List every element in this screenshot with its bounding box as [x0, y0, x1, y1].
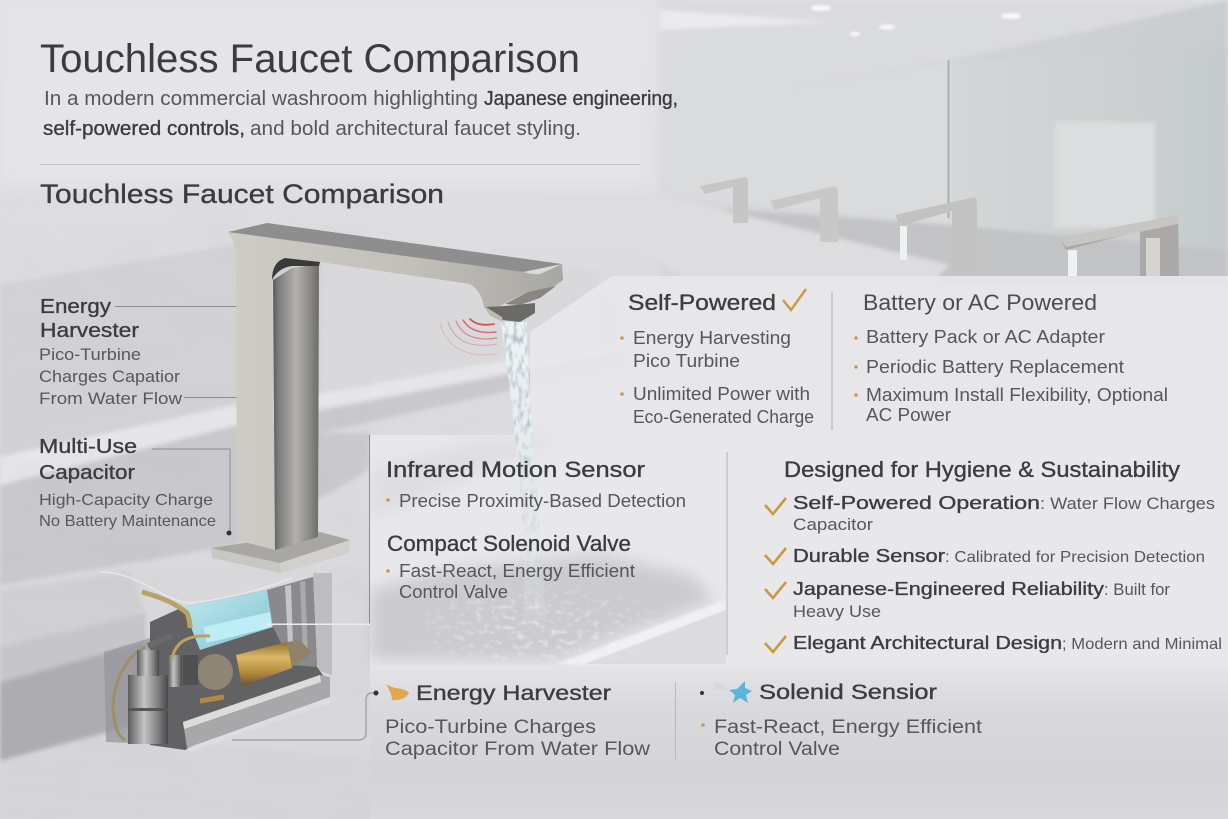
sensor and valve text: Fast-React, Energy Efficient: [399, 561, 635, 581]
background: marble counter and sink: [0, 240, 620, 819]
background faucets: [700, 177, 1179, 276]
brass solenoid: [287, 640, 312, 667]
callout: solenoid sensor: Fast-React, Energy Efficient: [714, 717, 983, 738]
sensor and valve text: Precise Proximity-Based Detection: [399, 491, 686, 511]
subtitle: self-powered controls,: [43, 118, 245, 140]
label: multi-use capacitor: Multi-Use: [39, 436, 137, 458]
self-powered column: Pico Turbine: [633, 351, 740, 371]
callout: energy harvester: [374, 682, 650, 760]
subtitle: Japanese engineering,: [484, 88, 678, 110]
label: energy harvester: Harvester: [40, 320, 139, 342]
sensor and valve text: Infrared Motion Sensor: [386, 457, 645, 482]
callout: energy harvester: Capacitor From Water Flow: [385, 739, 650, 760]
sensor and valve text: Compact Solenoid Valve: [387, 531, 631, 556]
fittings and tubes: [168, 655, 182, 687]
self-powered column: [620, 289, 814, 427]
marble veining: [0, 190, 370, 819]
faucet inner column: [273, 264, 319, 550]
label: energy harvester: Pico-Turbine: [39, 345, 141, 364]
label: energy harvester: From Water Flow: [39, 389, 183, 408]
base tray: [183, 675, 330, 748]
battery or AC column: Maximum Install Flexibility, Optional: [866, 385, 1168, 405]
section heading: Touchless Faucet Comparison: [40, 179, 444, 209]
hygiene and sustainability list: Elegant Architectural Design: [793, 632, 1062, 653]
callout: solenoid sensor: [700, 681, 983, 760]
label: energy harvester: Energy: [40, 296, 111, 318]
dark housing interior: [150, 577, 325, 750]
hygiene and sustainability list: : Water Flow Charges: [1040, 494, 1215, 513]
panel: component callouts: [370, 666, 1228, 819]
faucet nozzle: [484, 303, 535, 322]
icon: blue star: [729, 681, 752, 703]
self-powered column: Energy Harvesting: [633, 328, 791, 348]
panel: sensor and hygiene: [370, 435, 1228, 666]
glass capacitor module: [183, 590, 273, 650]
label: multi-use capacitor: High-Capacity Charge: [39, 492, 213, 509]
background: room ceiling and mirrors: [540, 0, 1228, 285]
icon: gold check: [783, 289, 806, 310]
subtitle: and bold architectural faucet styling.: [250, 118, 581, 140]
subtitle: In a modern commercial washroom highlighting: [44, 88, 478, 110]
battery or AC column: [854, 290, 1168, 425]
water stream: [501, 322, 546, 620]
ceiling lights: [811, 5, 1021, 36]
title: Touchless Faucet Comparison: [40, 37, 580, 81]
self-powered column: Self-Powered: [628, 290, 776, 315]
callout: solenoid sensor: Solenid Sensior: [759, 681, 937, 704]
panel: power comparison: [370, 276, 1228, 438]
hygiene and sustainability list: [765, 457, 1222, 653]
battery or AC column: Periodic Battery Replacement: [866, 357, 1124, 377]
hygiene and sustainability list: Durable Sensor: [793, 545, 945, 566]
callout: energy harvester: Energy Harvester: [416, 682, 611, 705]
self-powered column: Unlimited Power with: [633, 384, 810, 404]
power comparison text: [620, 289, 1168, 430]
label: multi-use capacitor: [39, 436, 216, 530]
panel: page header: [0, 0, 652, 185]
battery or AC column: Battery or AC Powered: [863, 290, 1097, 315]
battery or AC column: AC Power: [866, 405, 951, 425]
hygiene and sustainability list: : Built for: [1104, 580, 1170, 599]
sensor and valve text: [386, 457, 686, 602]
hygiene and sustainability list: ; Modern and Minimal: [1062, 636, 1222, 653]
icon: orange leaf: [386, 684, 409, 700]
label: energy harvester: [39, 296, 183, 408]
label: energy harvester: Charges Capatior: [39, 367, 180, 386]
callout: solenoid sensor: Control Valve: [714, 739, 840, 760]
steel cylinder: [128, 675, 168, 744]
hygiene and sustainability list: Capacitor: [793, 515, 873, 534]
basin water: [370, 438, 726, 666]
callout: energy harvester: Pico-Turbine Charges: [385, 717, 596, 738]
hygiene and sustainability list: Designed for Hygiene & Sustainability: [784, 457, 1180, 482]
faucet column and spout body: [228, 232, 563, 550]
icon: sensor waves: [440, 319, 497, 355]
icon: moon: [713, 683, 729, 695]
label: multi-use capacitor: No Battery Maintenance: [39, 513, 216, 530]
self-powered column: Eco-Generated Charge: [633, 407, 814, 427]
connector lines: [115, 306, 376, 740]
faucet: [211, 223, 563, 573]
icon: gold checks: [765, 498, 786, 652]
subtitle: [43, 88, 678, 140]
hygiene and sustainability list: Heavy Use: [793, 602, 881, 621]
faucet base: [211, 532, 350, 573]
label: multi-use capacitor: Capacitor: [39, 462, 135, 484]
spout tip shading: [505, 286, 556, 305]
hygiene and sustainability list: : Calibrated for Precision Detection: [945, 549, 1205, 566]
sensor and valve text: Control Valve: [399, 582, 508, 602]
hygiene and sustainability list: Self-Powered Operation: [793, 492, 1040, 513]
internal valve assembly: [100, 572, 332, 752]
translucent housing: [313, 573, 332, 675]
hygiene and sustainability list: Japanese-Engineered Reliability: [793, 578, 1105, 599]
battery or AC column: Battery Pack or AC Adapter: [866, 327, 1105, 347]
